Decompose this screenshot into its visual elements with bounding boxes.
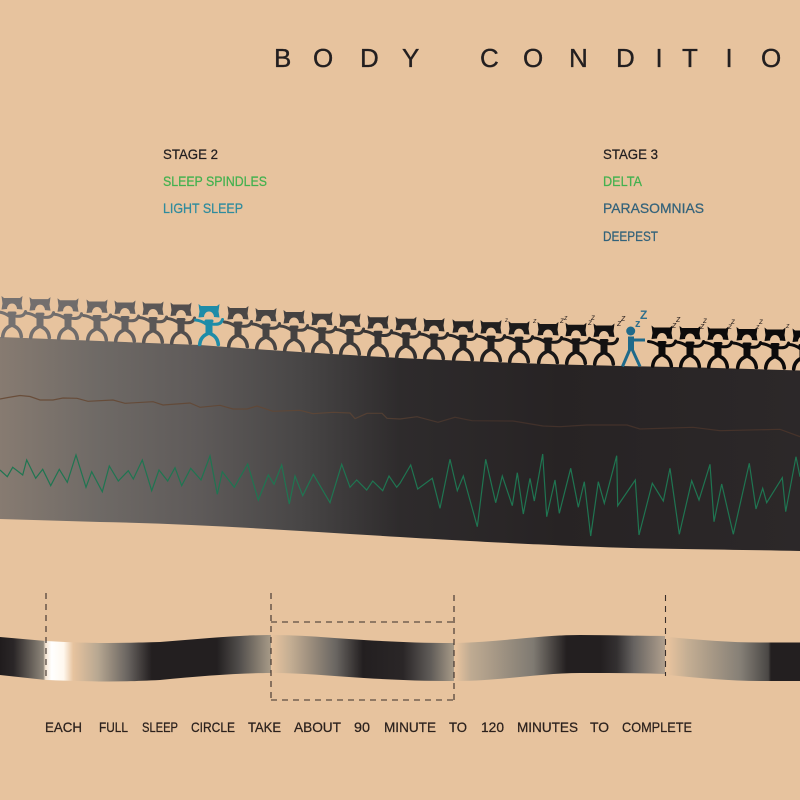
small sleep z marks: z xyxy=(675,314,681,324)
title xyxy=(274,43,781,73)
title: I xyxy=(656,43,663,73)
small sleep z marks: z xyxy=(590,313,595,322)
text block: stage 3: DEEPEST xyxy=(603,228,658,244)
icon: stage 3 walking figure: Z xyxy=(640,308,647,322)
text block: stage 2: STAGE 2 xyxy=(163,146,218,162)
title: O xyxy=(523,43,543,73)
icon: stage 3 walking figure: z xyxy=(635,318,641,330)
small sleep z marks: z xyxy=(702,316,707,325)
caption: EACH xyxy=(45,719,82,735)
text block: stage 2 xyxy=(163,146,267,216)
caption xyxy=(45,719,692,735)
text block: stage 2: SLEEP SPINDLES xyxy=(163,173,267,189)
caption: 120 xyxy=(481,719,504,735)
small sleep z marks: z xyxy=(504,318,508,324)
small sleep z marks: z xyxy=(563,315,568,322)
caption: TO xyxy=(449,719,467,735)
caption: COMPLETE xyxy=(622,719,692,735)
small sleep z marks: z xyxy=(620,313,626,323)
title: O xyxy=(761,43,781,73)
small sleep z marks: z xyxy=(730,317,735,326)
title: I xyxy=(726,43,733,73)
small sleep z marks xyxy=(504,313,790,331)
title: B xyxy=(274,43,291,73)
icon: stage 3 walking figure xyxy=(622,308,647,366)
icon: stage 2 teal figure xyxy=(196,304,222,344)
title: D xyxy=(360,43,379,73)
caption: TO xyxy=(590,719,609,735)
small sleep z marks: z xyxy=(532,318,537,325)
text block: stage 3 xyxy=(603,146,704,244)
title: D xyxy=(616,43,635,73)
title: N xyxy=(569,43,588,73)
title: C xyxy=(480,43,499,73)
sleep cycle ribbon xyxy=(0,635,800,682)
caption: ABOUT xyxy=(294,719,341,735)
small sleep z marks: z xyxy=(699,321,705,331)
small sleep z marks: z xyxy=(671,320,677,330)
small sleep z marks: z xyxy=(616,318,622,328)
brown wave line xyxy=(0,396,800,437)
sleeping band xyxy=(0,337,800,551)
small sleep z marks: z xyxy=(785,323,790,330)
text block: stage 2: LIGHT SLEEP xyxy=(163,200,243,216)
text block: stage 3: STAGE 3 xyxy=(603,146,658,162)
caption: SLEEP xyxy=(142,719,178,735)
small sleep z marks: z xyxy=(758,317,763,326)
title: O xyxy=(313,43,333,73)
caption: MINUTE xyxy=(384,719,436,735)
row of sleeping figures with pillows xyxy=(0,296,800,369)
small sleep z marks: z xyxy=(559,316,564,325)
small sleep z marks: z xyxy=(727,322,732,331)
title: Y xyxy=(402,43,419,73)
caption: CIRCLE xyxy=(191,719,235,735)
title: T xyxy=(682,43,698,73)
caption: MINUTES xyxy=(517,719,578,735)
small sleep z marks: z xyxy=(755,324,760,331)
dashed cycle markers xyxy=(46,593,666,700)
small sleep z marks: z xyxy=(587,318,592,327)
text block: stage 3: DELTA xyxy=(603,173,643,189)
caption: TAKE xyxy=(248,719,281,735)
caption: FULL xyxy=(99,719,128,735)
green wave line xyxy=(0,454,800,536)
caption: 90 xyxy=(354,719,370,735)
text block: stage 3: PARASOMNIAS xyxy=(603,200,704,216)
